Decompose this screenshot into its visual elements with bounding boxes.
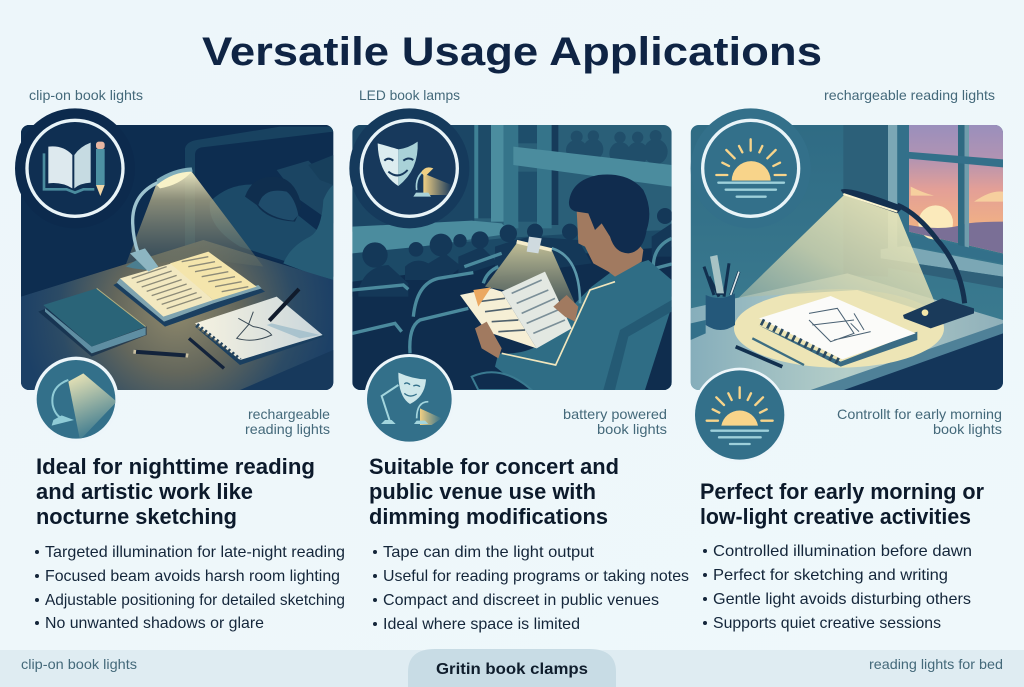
top label: clip-on book lights: clip-on book lights — [29, 87, 143, 103]
light beam — [125, 172, 263, 267]
panel: early morning illustration — [691, 108, 1003, 462]
side label: rechargeable reading lights — [245, 406, 330, 437]
open book — [460, 272, 572, 348]
bullets: column 1 — [35, 544, 345, 632]
bullets: column 3: Gentle light avoids disturbing others — [713, 591, 971, 608]
light beam — [739, 195, 941, 317]
heading: column 2: Suitable for concert and — [369, 454, 619, 479]
bullets: column 2: Tape can dim the light output — [383, 544, 595, 561]
side label: battery powered book lights: battery powered — [563, 406, 667, 422]
heading: column 3 — [700, 479, 984, 529]
stage floor — [352, 221, 512, 257]
bullets: column 3: Perfect for sketching and writing — [713, 567, 948, 584]
top circle icon: book and pencil — [15, 108, 135, 228]
bottom circle icon: clip lamp — [33, 357, 119, 442]
window — [881, 125, 1003, 288]
side label: controllt for early morning book lights: Controllt for early morning — [837, 406, 1002, 422]
lit pool on desk — [734, 289, 944, 368]
side label: rechargeable reading lights: reading lights — [245, 421, 330, 437]
bottom circle icon: sunrise — [692, 368, 787, 462]
lamp beam — [485, 243, 575, 303]
hands — [475, 322, 502, 358]
bullets: column 1: No unwanted shadows or glare — [45, 615, 264, 632]
heading: column 1: and artistic work like — [36, 479, 253, 504]
pencil — [752, 338, 804, 365]
top circle icon: sunrise — [691, 108, 811, 228]
footer label left: clip-on book lights — [21, 656, 137, 672]
desk — [21, 240, 333, 390]
pencil cup — [704, 255, 739, 330]
balcony — [513, 130, 672, 187]
bullets: column 1: Adjustable positioning for detailed sketching — [45, 592, 345, 609]
bullets: column 3 — [703, 543, 972, 632]
footer label right: reading lights for bed — [869, 656, 1003, 672]
open book — [113, 252, 265, 327]
lamp arm and clip — [126, 167, 193, 272]
heading: column 1: Ideal for nighttime reading — [36, 454, 315, 479]
bullets: column 1: Targeted illumination for late-night reading — [45, 544, 345, 561]
desk — [691, 273, 1003, 390]
bullets: column 2 — [373, 544, 689, 633]
heading: column 2: public venue use with — [369, 479, 596, 504]
side label: controllt for early morning book lights: book lights — [933, 421, 1002, 437]
heading: column 3: low-light creative activities — [700, 504, 971, 529]
bullets: column 2: Compact and discreet in public venues — [383, 592, 659, 609]
heading: column 3: Perfect for early morning or — [700, 479, 984, 504]
sleeping person — [210, 155, 333, 280]
bullets: column 2: Useful for reading programs or taking notes — [383, 568, 689, 585]
spiral sketchbook — [758, 296, 917, 367]
reader — [472, 174, 672, 390]
pencil on desk — [189, 338, 224, 368]
bullets: column 3: Controlled illumination before dawn — [713, 543, 972, 560]
closed notebook — [38, 288, 147, 357]
panel: concert venue illustration — [349, 108, 673, 445]
footer centre tab: Gritin book clamps — [436, 661, 588, 678]
desk lamp — [841, 189, 974, 328]
top circle icon: theatre mask and lamp — [349, 108, 469, 228]
bullets: column 1: Focused beam avoids harsh room lighting — [45, 568, 340, 585]
bullets: column 2: Ideal where space is limited — [383, 616, 580, 633]
audience silhouettes — [352, 208, 673, 390]
heading: column 2 — [369, 454, 619, 529]
heading: column 1: nocturne sketching — [36, 504, 237, 529]
pens — [736, 347, 782, 367]
sketchpad — [195, 289, 324, 365]
heading: column 1 — [36, 454, 315, 529]
top label: rechargeable reading lights: rechargeable reading lights — [824, 87, 995, 103]
footer band — [0, 649, 1024, 687]
side label: rechargeable reading lights: rechargeable — [248, 406, 330, 422]
footer centre tab — [408, 649, 616, 687]
side label: battery powered book lights: book lights — [597, 421, 667, 437]
panel: nighttime illustration — [15, 108, 333, 442]
top label: LED book lamps: LED book lamps — [359, 87, 460, 103]
title: Versatile Usage Applications — [202, 30, 822, 74]
side label: controllt for early morning book lights — [837, 406, 1002, 437]
loose pens — [133, 352, 188, 356]
heading: column 2: dimming modifications — [369, 504, 608, 529]
reading lamp — [517, 237, 580, 303]
side label: battery powered book lights — [563, 406, 667, 437]
bottom circle icon: mask and lamps — [364, 354, 455, 445]
bullets: column 3: Supports quiet creative sessions — [713, 615, 941, 632]
seat backs — [352, 238, 672, 353]
